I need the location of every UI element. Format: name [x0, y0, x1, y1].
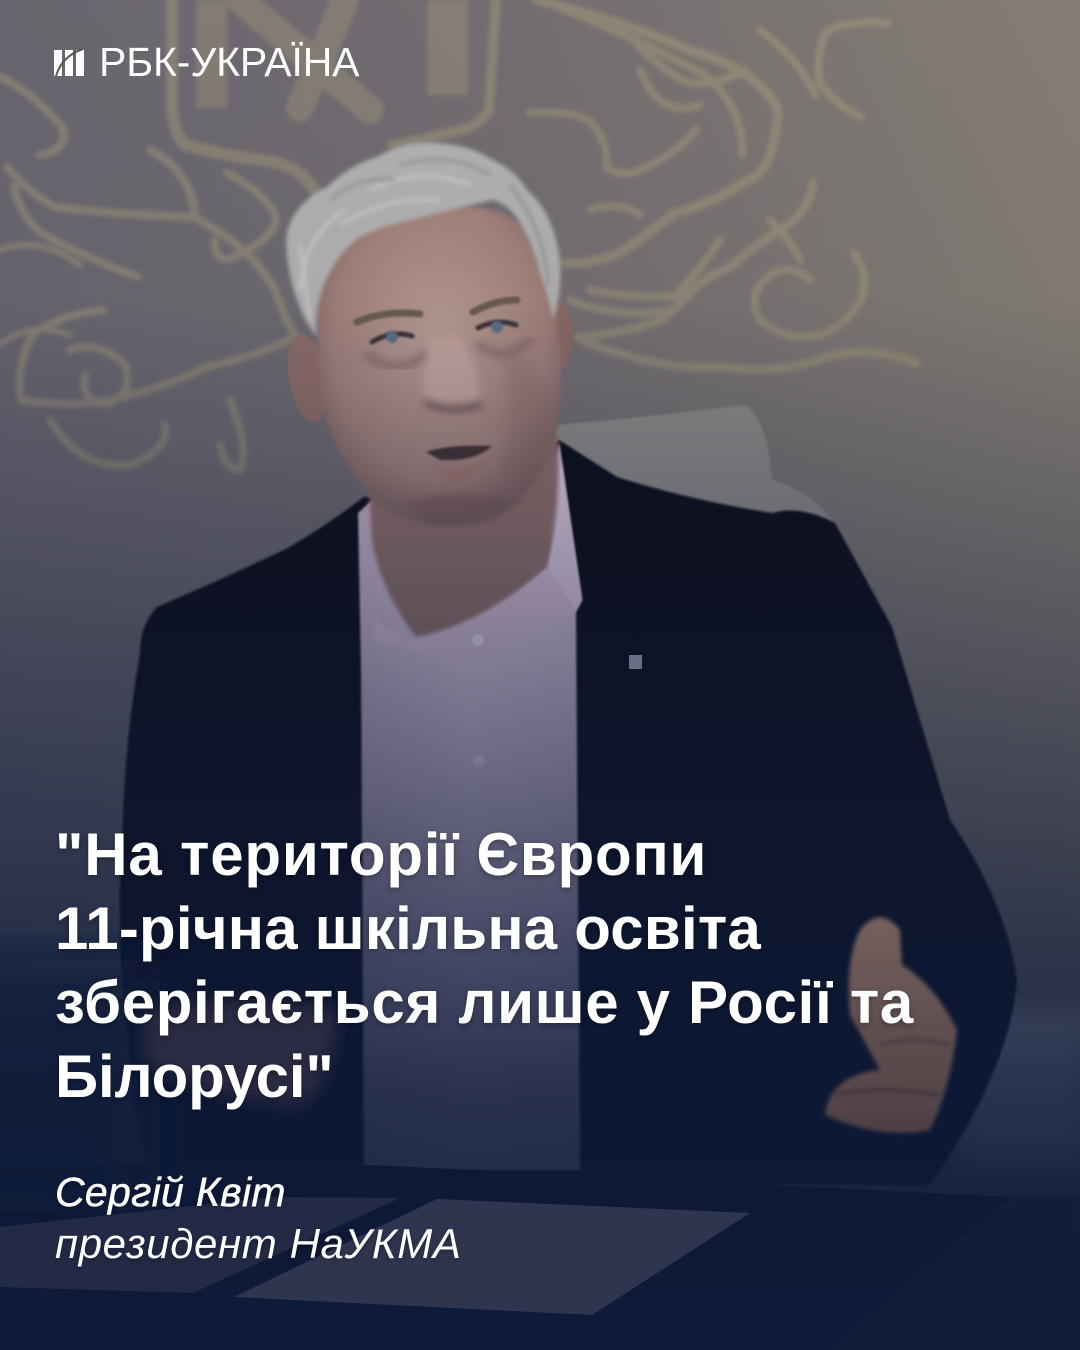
paper left [0, 1197, 400, 1293]
lapel pin [629, 655, 642, 669]
author attribution: Сергій Квіт [55, 1169, 286, 1215]
desk surface right [830, 1197, 1080, 1350]
ear right [549, 302, 573, 370]
nose [424, 335, 482, 409]
logo: RBC-Ukraine [54, 39, 360, 85]
brows and eyes [357, 300, 517, 342]
quote heading: Білорусі" [55, 1043, 334, 1110]
hair [286, 143, 560, 337]
ear left [282, 331, 334, 425]
quote heading [55, 821, 914, 1111]
author attribution [55, 1169, 461, 1268]
paper centre [234, 1199, 750, 1315]
logo mark [54, 48, 84, 76]
jacket [120, 440, 1017, 1185]
collar fold [375, 567, 576, 665]
face [317, 207, 561, 525]
lower lip [432, 458, 488, 482]
quote heading: "На території Європи [55, 821, 707, 888]
shirt buttons [472, 634, 485, 767]
chair [555, 405, 832, 620]
quote heading: зберігається лише у Росії та [55, 969, 914, 1036]
left hand, blurred [145, 1000, 337, 1105]
hair shadows [330, 159, 548, 285]
quote heading: 11-річна шкільна освіта [55, 895, 761, 962]
hair highlights [300, 176, 470, 320]
desk [0, 1165, 1012, 1350]
raised hand [825, 918, 957, 1133]
author attribution: президент НаУКМА [55, 1220, 461, 1267]
logo wordmark: РБК-УКРАЇНА [99, 39, 359, 85]
shirt [358, 443, 582, 1170]
right cheek shadow [490, 350, 550, 515]
eye bags [368, 340, 530, 366]
neck [370, 430, 558, 637]
blurred bright wall lower right [960, 1010, 1080, 1160]
wall ornament [0, 0, 916, 470]
collar right [548, 443, 582, 612]
irises [386, 321, 503, 343]
chin shadow [400, 494, 510, 526]
dark lower-left blur [0, 960, 160, 1240]
mouth [426, 446, 492, 460]
